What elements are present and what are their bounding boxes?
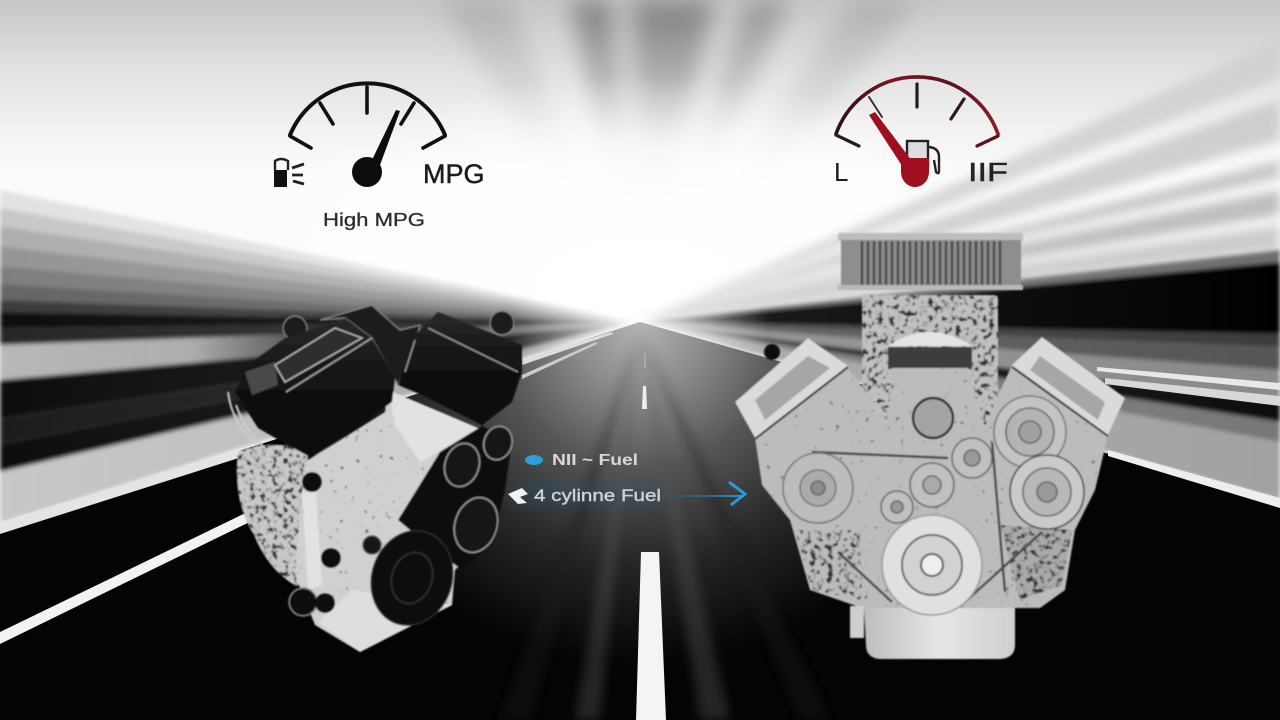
valve cover left [735,338,848,439]
blue glow [510,482,660,508]
gauge dial arc and ticks [290,83,445,148]
lower chrome left [795,530,862,600]
comparison labels and arrow [508,452,745,508]
icon: fuel pump [907,141,939,173]
engine: small efficient engine [228,305,522,652]
lower chrome right [1000,525,1072,600]
intake chrome backdrop [862,295,998,425]
engine top cover left [235,318,395,458]
engine wiring and chrome [237,445,322,586]
engine: large thirsty engine [735,233,1125,659]
road centre dashes [636,352,666,720]
icon: fuel can [274,159,304,187]
road surface [0,322,1280,720]
label: MPG scale: MPG [423,159,485,189]
gauge dial arc and ticks [836,77,998,146]
engine belts [812,442,1042,602]
engine pulleys [783,396,1084,615]
engine white pipe [302,492,322,590]
gauge needle [869,112,929,187]
intake arch and slot [888,332,972,369]
engine wire loop [228,392,265,448]
road edge lines [0,332,1280,644]
oil pan [850,606,1015,659]
engine pulleys [289,423,517,636]
engine block [755,365,1108,608]
label: High MPG: High MPG [323,209,425,230]
background: right horizon streaks [640,250,1280,500]
label: L scale: L [834,157,848,187]
gauge needle [352,110,400,187]
engine top tangle [283,305,514,385]
engine sump [318,590,452,652]
engine silver block [295,390,500,652]
arrow: blue [660,482,745,505]
icon: blue droplet [525,455,543,465]
engine belt area [398,426,512,570]
engine top cover right [398,312,522,425]
gauge: low MPG [834,77,1008,187]
icon: white droplet [508,488,528,504]
engine bright face [388,390,478,462]
gauge: high MPG [274,83,485,230]
label: no fuel: NII ~ Fuel [552,452,638,469]
air filter [838,233,1023,290]
label: IIF scale: IIF [968,157,1008,187]
label: cylinder fuel: 4 cylinne Fuel [534,486,661,505]
valve cover right [1012,337,1125,436]
background: left horizon streaks [0,190,640,524]
